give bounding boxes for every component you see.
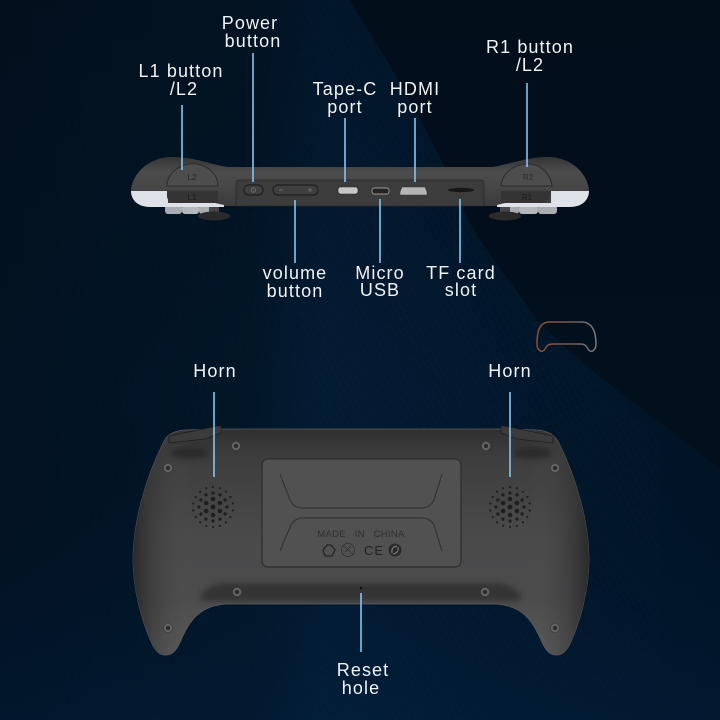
label: right Horn: [488, 361, 532, 477]
battery cover: [262, 459, 461, 567]
label: HDMI port: [390, 79, 440, 182]
small outline icon: [537, 322, 596, 351]
L1 button: L1: [188, 193, 197, 202]
label: L1 button /L2: /L2: [170, 79, 198, 99]
label: Type-C port: [313, 79, 377, 182]
console shell: [131, 157, 589, 206]
label: R1 button /L2: R1 button: [486, 37, 574, 57]
label: R1 button /L2: /L2: [516, 55, 544, 75]
R1 button: R1: [522, 193, 533, 202]
white right shoulder: [497, 191, 589, 207]
label: Power button: button: [225, 31, 281, 51]
label: left Horn: [193, 361, 237, 477]
white left shoulder: [131, 191, 224, 207]
grip shadows: [170, 447, 552, 459]
screws: [164, 442, 560, 632]
label: Reset hole: hole: [342, 678, 380, 698]
Type-C port: [338, 187, 358, 194]
certification icons: CE: [364, 543, 384, 558]
label: volume button: volume: [263, 263, 327, 283]
label: left Horn: Horn: [193, 361, 237, 381]
left speaker grille: [192, 486, 234, 528]
HDMI port: [400, 187, 427, 195]
R2 button: [501, 164, 552, 186]
label: Reset hole: [337, 593, 389, 698]
label: Type-C port: port: [327, 97, 363, 117]
top view of console: [131, 157, 589, 220]
reset hole: [360, 587, 362, 589]
L2 button: [167, 164, 218, 186]
back shell: [133, 429, 589, 655]
R1 button: [501, 191, 551, 203]
label: Reset hole: Reset: [337, 660, 389, 680]
R2 button: R2: [523, 173, 534, 182]
shoulder triggers: [169, 426, 553, 443]
TF card slot: [448, 188, 474, 192]
label: Micro USB: USB: [360, 280, 400, 300]
label: Type-C port: Tape-C: [313, 79, 377, 99]
label: TF card slot: TF card: [426, 263, 496, 283]
lower dark band: [201, 583, 521, 601]
label: HDMI port: port: [397, 97, 433, 117]
label: Micro USB: [355, 199, 405, 300]
volume button: [273, 185, 318, 195]
label: right Horn: Horn: [488, 361, 532, 381]
label: R1 button /L2: [486, 37, 574, 167]
label: Power button: Power: [222, 13, 278, 33]
label: L1 button /L2: L1 button: [139, 61, 223, 81]
L1 button: [167, 191, 218, 203]
right speaker grille: [489, 486, 531, 528]
label: TF card slot: slot: [445, 280, 477, 300]
back view of console: [133, 426, 589, 655]
label: Power button: [222, 13, 281, 182]
rear thumbsticks and face buttons: [165, 205, 557, 220]
shell shading: [133, 429, 589, 655]
L2 button: L2: [188, 173, 197, 182]
Micro USB port: [372, 188, 389, 194]
made in china text: MADE IN CHINA: [317, 529, 405, 540]
certification icons: [323, 543, 402, 558]
port panel: [236, 180, 484, 206]
label: volume button: [263, 200, 327, 301]
power button: [244, 185, 263, 195]
label: HDMI port: HDMI: [390, 79, 440, 99]
label: L1 button /L2: [139, 61, 223, 170]
label: Micro USB: Micro: [355, 263, 405, 283]
label: TF card slot: [426, 199, 496, 300]
label: volume button: button: [267, 281, 323, 301]
